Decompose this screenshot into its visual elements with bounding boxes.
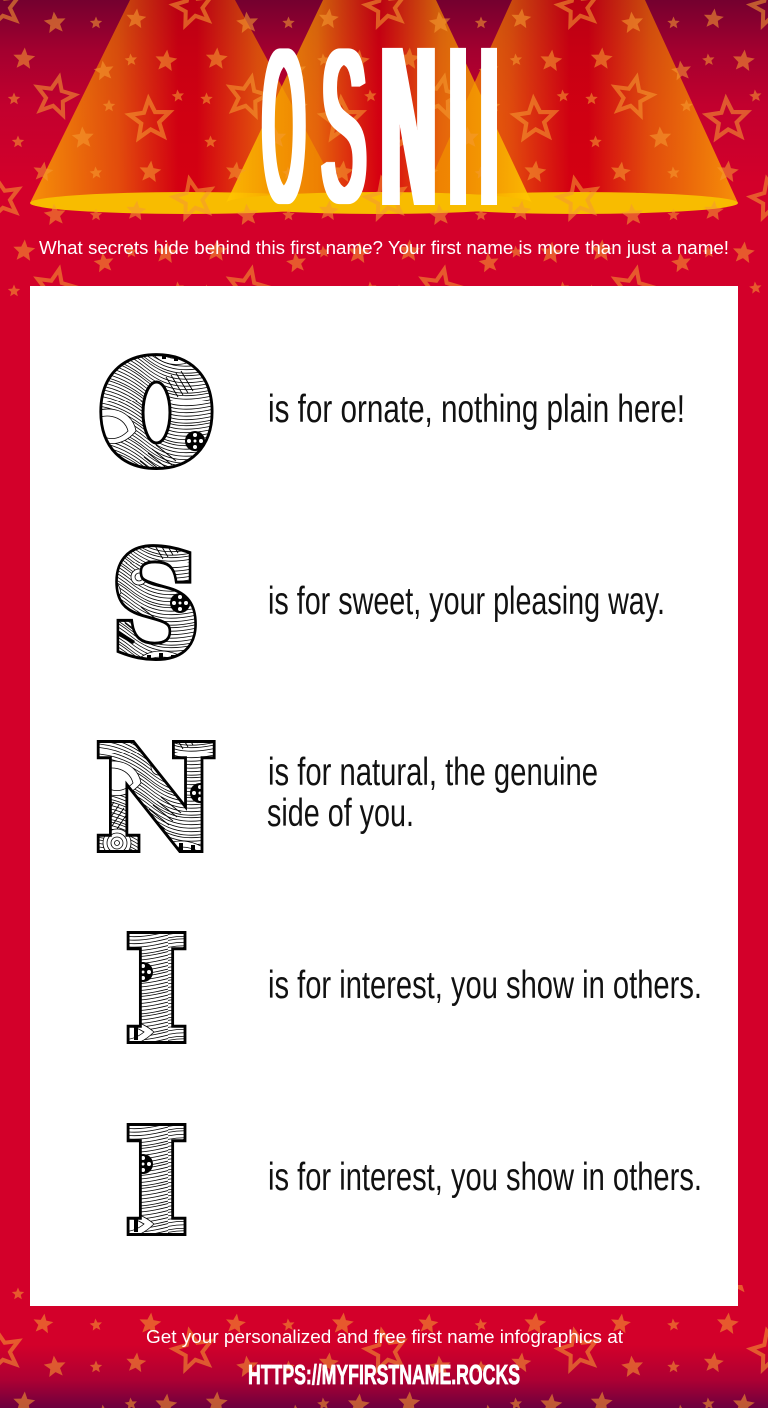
title: S bbox=[322, 3, 366, 249]
letter row N bbox=[96, 718, 598, 882]
letter row I second bbox=[126, 1100, 702, 1264]
star pattern: bottom bbox=[0, 1285, 768, 1408]
icon: ornate letter N: N bbox=[96, 718, 216, 882]
icon: ornate letter N: N bbox=[96, 718, 216, 882]
letter row I bbox=[126, 908, 702, 1072]
text: N line bbox=[267, 751, 598, 835]
icon: ornate letter I: I bbox=[126, 1100, 187, 1264]
text: I bbox=[481, 0, 497, 260]
spotlight: left cone bbox=[30, 0, 345, 214]
subtitle: What secrets hide behind this first name? Your first name is more than just a name! bbox=[39, 238, 729, 258]
title: I bbox=[450, 0, 466, 260]
icon: ornate letter O: O bbox=[99, 332, 214, 496]
icon: ornate letter I: I bbox=[126, 1100, 187, 1264]
title bbox=[263, 0, 497, 260]
letter row O bbox=[99, 332, 685, 496]
text: N line: side of you. bbox=[267, 792, 414, 835]
spotlights bbox=[30, 0, 738, 214]
star pattern: top bbox=[0, 0, 768, 300]
footer url: HTTPS://MYFIRSTNAME.ROCKS bbox=[248, 1359, 520, 1390]
spotlight: right cone bbox=[420, 0, 738, 214]
icon: ornate letter I: I bbox=[126, 908, 187, 1072]
panel: letters bbox=[30, 286, 738, 1306]
spotlight: middle cone bbox=[226, 0, 532, 214]
text: N line: is for natural, the genuine bbox=[268, 751, 598, 794]
footer text: Get your personalized and free first name infographics at bbox=[146, 1327, 623, 1347]
title: N bbox=[381, 0, 436, 260]
icon: ornate letter O: O bbox=[99, 332, 214, 496]
letter row S bbox=[112, 524, 665, 688]
icon: ornate letter S: S bbox=[112, 524, 199, 688]
icon: ornate letter S: S bbox=[112, 524, 199, 688]
title: O bbox=[263, 3, 304, 249]
icon: ornate letter I: I bbox=[126, 908, 187, 1072]
